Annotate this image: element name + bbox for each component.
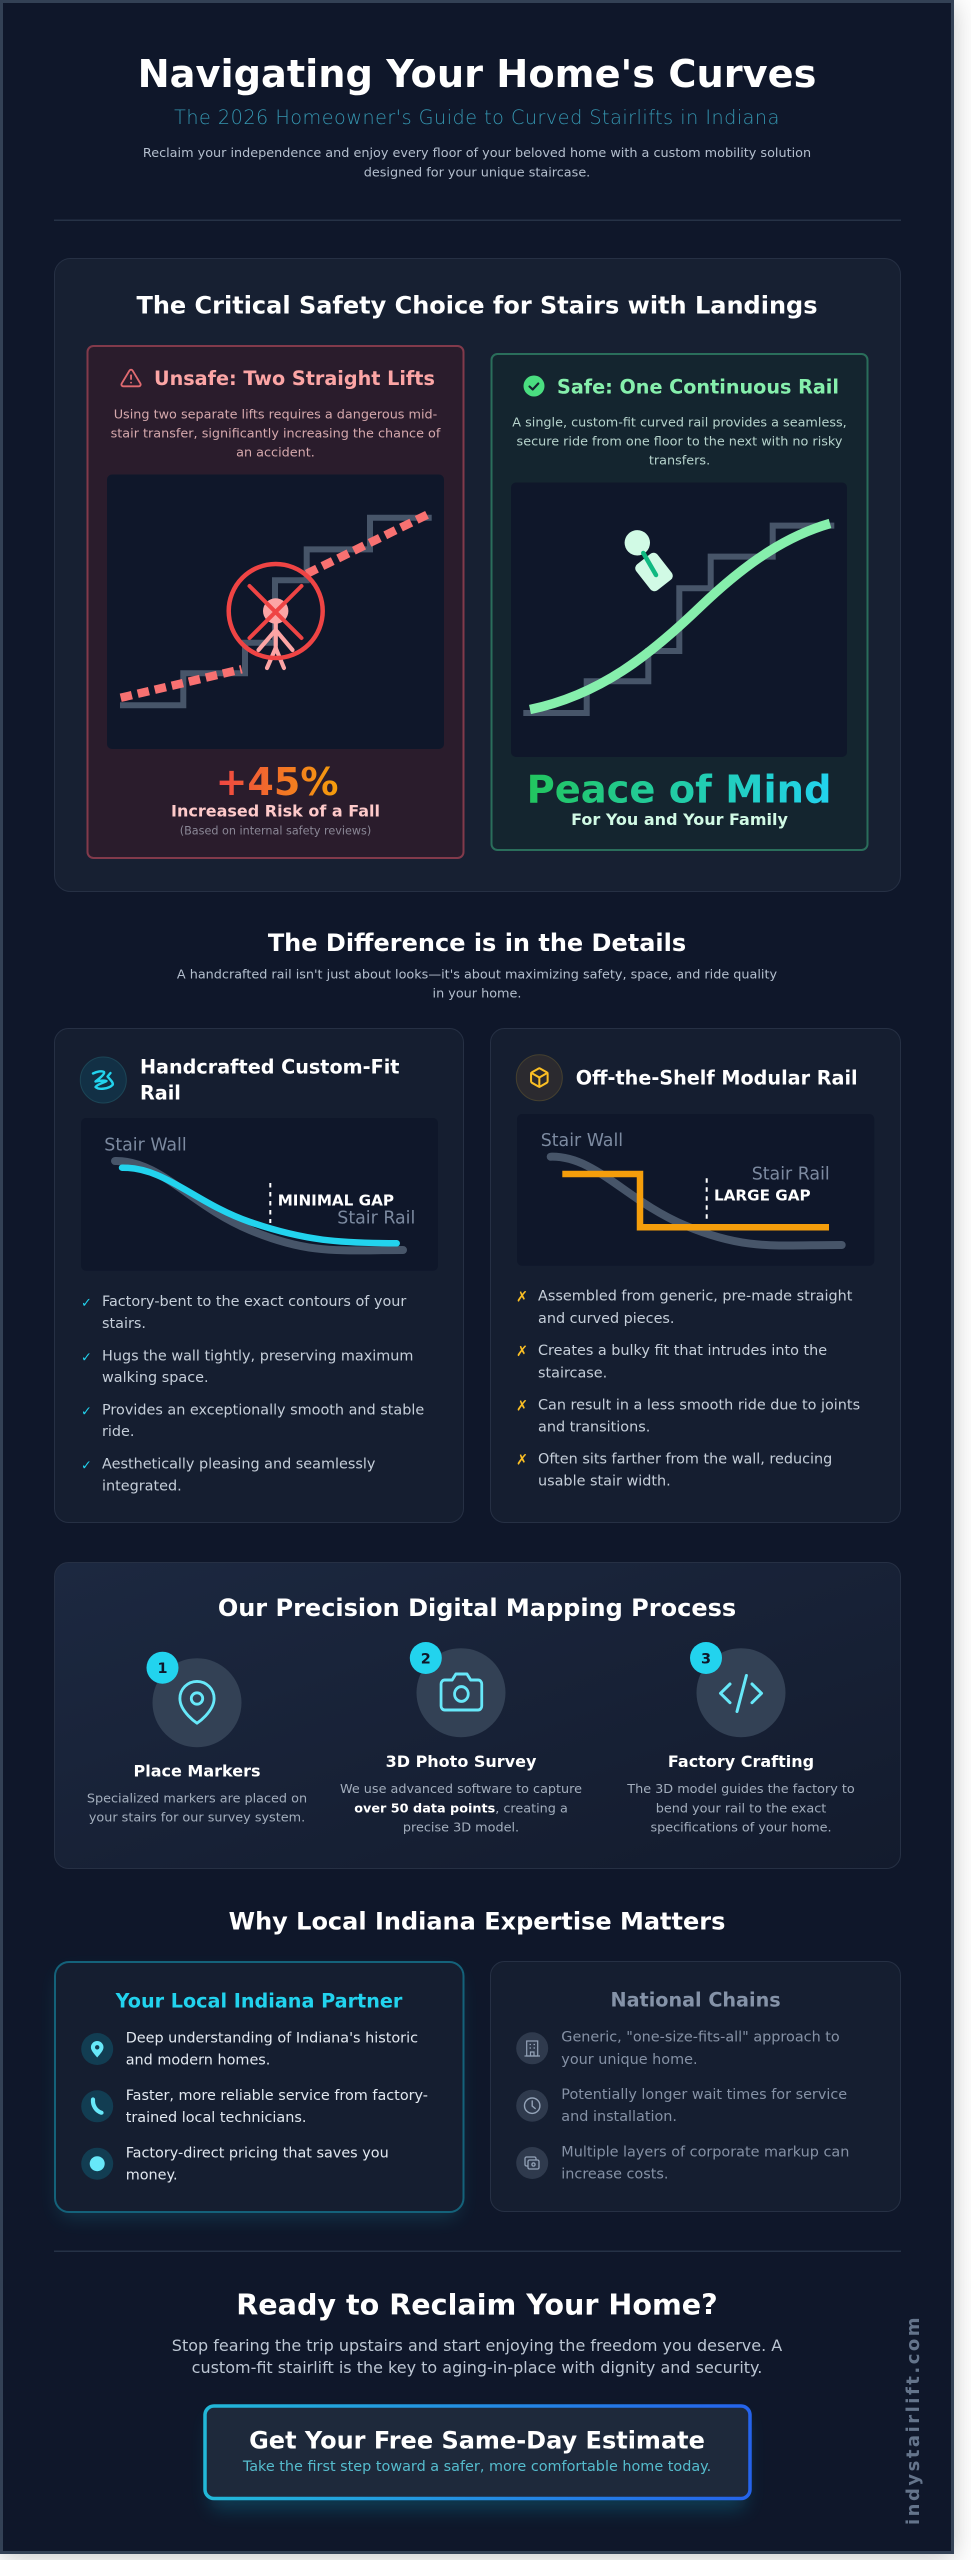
list: handcrafted benefits: Factory-bent to the exact contours of your [102, 1294, 406, 1310]
text: unsafe description: Using two separate lifts requires a dangerous mid- [114, 408, 437, 422]
list: handcrafted benefits: walking space. [102, 1370, 209, 1386]
badge 3: 3 [701, 1651, 711, 1667]
item: factory-direct pricing [81, 2145, 389, 2184]
list: modular drawbacks: ✗ [516, 1452, 528, 1468]
item: wait times: and installation. [561, 2109, 677, 2125]
item: generic approach [516, 2030, 840, 2068]
icon: map pin [180, 1681, 214, 1723]
stat: peace of mind: Peace of Mind [527, 768, 831, 812]
intro text [143, 146, 811, 180]
badge 2 [410, 1642, 442, 1674]
item: reliable service: trained local technicians. [126, 2110, 306, 2126]
list: modular drawbacks: ✗ [516, 1344, 528, 1360]
list: handcrafted benefits: Provides an exceptionally smooth and stable [102, 1402, 424, 1418]
step 3: factory crafting: bend your rail to the exact [656, 1801, 826, 1816]
badge 1: 1 [157, 1661, 168, 1677]
text: safe description [512, 416, 847, 468]
panel: national chains [490, 1962, 900, 2212]
panel: critical safety choice [54, 258, 900, 892]
heading: safe: Safe: One Continuous Rail [557, 376, 839, 398]
badge 3 [690, 1642, 722, 1674]
icon: camera [441, 1674, 482, 1710]
list: handcrafted benefits: ✓ [81, 1350, 92, 1365]
step 1: place markers: Place Markers [134, 1762, 260, 1781]
heading: national chains: National Chains [611, 1989, 781, 2012]
section heading: the difference: The Difference is in the Details [268, 929, 686, 957]
text: cta description [172, 2336, 782, 2377]
diagram: two straight lifts [107, 474, 444, 749]
person falling [258, 598, 292, 668]
step 3: factory crafting [626, 1642, 855, 1835]
step 3: factory crafting: Factory Crafting [668, 1752, 814, 1771]
text: safe description: secure ride from one floor to the next with no risky [517, 434, 843, 450]
text: cta description: custom-fit stairlift is the key to aging-in-place with dignity and security. [192, 2358, 762, 2377]
list: handcrafted benefits: ✓ [81, 1458, 92, 1473]
item: corporate markup: Multiple layers of corporate markup can [561, 2144, 849, 2160]
item: factory-direct pricing: money. [126, 2168, 178, 2184]
list: handcrafted benefits: integrated. [102, 1478, 182, 1494]
step 2: 3d photo survey: 3D Photo Survey [386, 1752, 537, 1771]
list: modular drawbacks [516, 1289, 860, 1490]
step 3: factory crafting: The 3D model guides the factory to [626, 1782, 855, 1797]
item: indiana homes: and modern homes. [126, 2053, 270, 2069]
icon: custom rail squiggle [80, 1057, 126, 1103]
heading: handcrafted [140, 1056, 399, 1104]
item: wait times: Potentially longer wait times for service [561, 2087, 847, 2103]
text: safe description: A single, custom-fit curved rail provides a seamless, [512, 416, 847, 430]
icon: box [516, 1055, 562, 1101]
step 2: 3d photo survey [340, 1642, 582, 1835]
diagram: continuous rail [511, 482, 847, 757]
badge 2: 2 [421, 1651, 431, 1667]
heading: digital mapping: Our Precision Digital Mapping Process [218, 1594, 736, 1622]
diagram: large gap [517, 1114, 874, 1266]
list: modular drawbacks: ✗ [516, 1290, 528, 1306]
label: for you and your family: For You and Your Family [571, 810, 788, 829]
list: modular drawbacks: Often sits farther from the wall, reducing [538, 1451, 832, 1467]
list: modular drawbacks: Can result in a less smooth ride due to joints [538, 1397, 860, 1413]
text: safe description: transfers. [649, 454, 710, 468]
heading: off-the-shelf: Off-the-Shelf Modular Rail [576, 1066, 858, 1089]
watermark: indystairlift.com: indystairlift.com [903, 2315, 924, 2525]
section intro [177, 968, 778, 1002]
list: handcrafted benefits: ✓ [81, 1296, 92, 1311]
seated rider [625, 530, 675, 593]
list: handcrafted benefits: stairs. [102, 1316, 146, 1332]
text: unsafe description [111, 408, 441, 460]
label: increased risk: Increased Risk of a Fall [171, 802, 380, 820]
intro text: designed for your unique staircase. [364, 166, 590, 180]
text: unsafe description: stair transfer, significantly increasing the chance of [111, 426, 441, 442]
item: generic approach: your unique home. [561, 2052, 698, 2068]
title: Navigating Your Home's Curves [138, 52, 816, 97]
diagram: minimal gap [81, 1118, 438, 1271]
panel: handcrafted custom-fit rail [54, 1028, 464, 1522]
list: handcrafted benefits: Hugs the wall tightly, preserving maximum [102, 1348, 413, 1364]
danger mark [229, 564, 323, 658]
icon: warning triangle [121, 370, 141, 386]
item: corporate markup [516, 2144, 849, 2183]
step 2: 3d photo survey: precise 3D model. [403, 1820, 519, 1835]
diagram: large gap: LARGE GAP [714, 1187, 811, 1205]
list: handcrafted benefits: Aesthetically pleasing and seamlessly [102, 1456, 376, 1472]
step 2: 3d photo survey: over 50 data points, creating a [354, 1801, 568, 1816]
intro text: Reclaim your independence and enjoy every floor of your beloved home with a custom mobility solution [143, 146, 811, 161]
section heading: why local: Why Local Indiana Expertise Matters [229, 1908, 725, 1936]
call to action [172, 2287, 782, 2510]
step 3: factory crafting: specifications of your home. [650, 1820, 832, 1835]
heading: ready: Ready to Reclaim Your Home? [236, 2287, 718, 2321]
icon: code [720, 1676, 762, 1712]
heading: critical safety choice: The Critical Safety Choice for Stairs with Landings [136, 292, 818, 320]
note: internal reviews: (Based on internal safety reviews) [180, 824, 371, 838]
item: corporate markup: increase costs. [561, 2167, 668, 2183]
panel: off-the-shelf modular rail [490, 1028, 900, 1522]
stat: +45%: +45% [216, 760, 338, 804]
item: reliable service [81, 2088, 428, 2126]
heading: local partner: Your Local Indiana Partner [115, 1989, 403, 2012]
diagram: minimal gap: MINIMAL GAP [278, 1191, 394, 1209]
section heading: the difference [177, 929, 778, 1002]
item: factory-direct pricing: Factory-direct pricing that saves you [126, 2145, 389, 2161]
button: free estimate: Take the first step toward a safer, more comfortable home today. [242, 2459, 711, 2475]
panel: safe one continuous rail [492, 354, 868, 850]
item: wait times [516, 2087, 847, 2125]
section intro: in your home. [433, 987, 521, 1002]
list: handcrafted benefits: ✓ [81, 1404, 92, 1419]
diagram: large gap: Stair Rail [752, 1164, 830, 1184]
subtitle: The 2026 Homeowner's Guide to Curved Stairlifts in Indiana [174, 106, 780, 129]
icon: check circle [524, 376, 544, 396]
list: modular drawbacks: and curved pieces. [538, 1311, 675, 1327]
list: handcrafted benefits [81, 1294, 424, 1494]
header [138, 52, 816, 180]
list: modular drawbacks: and transitions. [538, 1420, 650, 1436]
panel: digital mapping process [54, 1562, 900, 1868]
heading: handcrafted: Rail [140, 1081, 181, 1104]
list: modular drawbacks: Creates a bulky fit that intrudes into the [538, 1343, 827, 1359]
item: generic approach: Generic, "one-size-fits-all" approach to [561, 2030, 840, 2046]
step 1: place markers [87, 1652, 307, 1826]
item: reliable service: Faster, more reliable service from factory- [126, 2088, 428, 2104]
diagram: minimal gap: Stair Wall [104, 1136, 187, 1156]
list: modular drawbacks: Assembled from generic, pre-made straight [538, 1289, 853, 1305]
step 2: 3d photo survey: We use advanced software to capture [340, 1782, 582, 1797]
button: free estimate: Get Your Free Same-Day Estimate [249, 2426, 705, 2454]
panel: local indiana partner [55, 1962, 464, 2218]
list: modular drawbacks: ✗ [516, 1398, 528, 1414]
button: free estimate [205, 2406, 750, 2510]
section intro: A handcrafted rail isn't just about looks—it's about maximizing safety, space, and ride quality [177, 968, 778, 983]
item: indiana homes [81, 2030, 418, 2069]
step 1: place markers: Specialized markers are placed on [87, 1791, 307, 1806]
item: indiana homes: Deep understanding of Indiana's historic [126, 2030, 418, 2046]
list: modular drawbacks: staircase. [538, 1366, 607, 1382]
text: unsafe description: an accident. [236, 446, 315, 460]
badge 1 [146, 1652, 178, 1684]
list: handcrafted benefits: ride. [102, 1424, 134, 1440]
diagram: minimal gap: Stair Rail [337, 1209, 415, 1229]
text: cta description: Stop fearing the trip upstairs and start enjoying the freedom you deserve. A [172, 2336, 782, 2355]
heading: unsafe: Unsafe: Two Straight Lifts [154, 367, 435, 390]
panel: unsafe two straight lifts [88, 346, 464, 858]
list: modular drawbacks: usable stair width. [538, 1474, 671, 1490]
heading: handcrafted: Handcrafted Custom-Fit [140, 1056, 399, 1079]
diagram: large gap: Stair Wall [541, 1131, 623, 1151]
step 1: place markers: your stairs for our survey system. [89, 1811, 305, 1826]
